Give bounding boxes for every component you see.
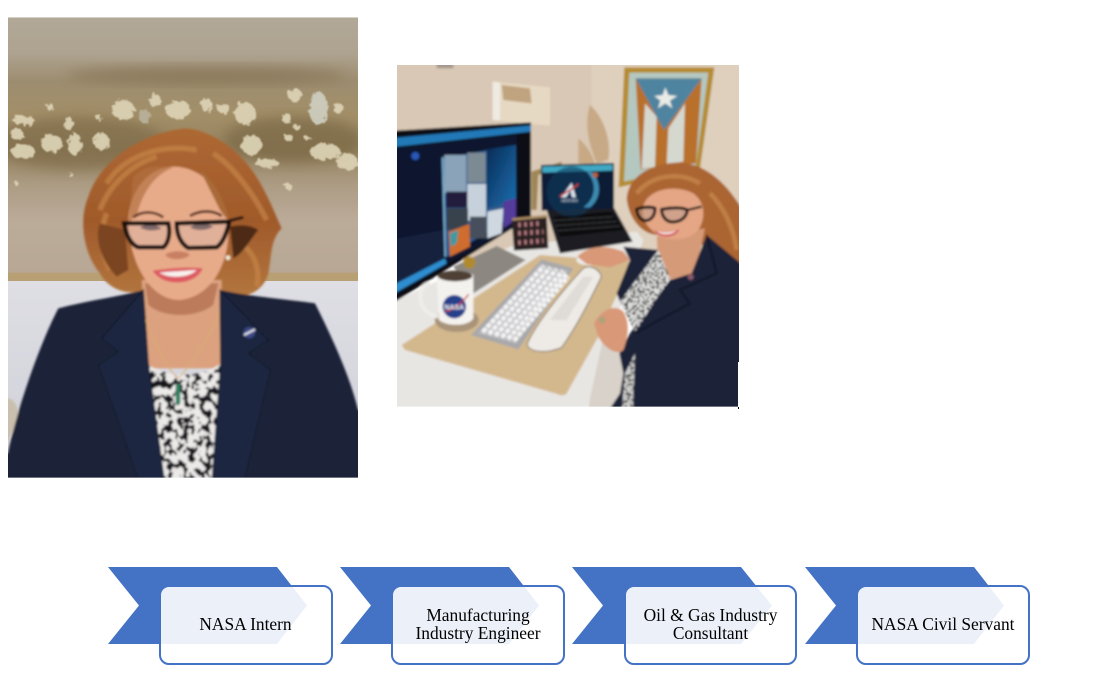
monitor image tiles (444, 155, 466, 193)
patterned block sign (512, 215, 548, 251)
jacket right (220, 289, 358, 478)
person: lapel pin (688, 274, 694, 280)
nose (165, 251, 190, 259)
eyes (140, 224, 213, 230)
monitor (390, 122, 531, 305)
person: hand with ring (594, 308, 628, 352)
lips and smile (153, 268, 203, 282)
glasses (124, 222, 229, 248)
person: arm and hand on mouse (577, 247, 630, 267)
step 4: NASA Civil Servant: NASA Civil Servant (872, 614, 1015, 634)
mug on coaster (420, 271, 479, 332)
wall behind subject (8, 281, 358, 454)
star (654, 87, 677, 108)
person: glasses (637, 207, 687, 222)
person: neck (657, 228, 705, 280)
step 3: Oil & Gas Industry Consultant (572, 567, 796, 664)
keyboard (471, 259, 573, 349)
wall art (500, 82, 550, 126)
desk photo (390, 60, 747, 413)
step 2: Manufacturing Industry Engineer: Manufacturing (426, 605, 530, 625)
person: smile (654, 229, 679, 237)
brown frame behind laptop (532, 162, 562, 210)
desk mat (402, 255, 632, 395)
Artemis logo (561, 183, 576, 197)
laptop (541, 163, 633, 253)
jacket left (8, 290, 143, 478)
step 3: Oil & Gas Industry Consultant: Consultant (673, 623, 748, 643)
person: hair (627, 163, 747, 268)
step 1: NASA Intern: NASA Intern (199, 614, 292, 634)
step 4: NASA Civil Servant (805, 567, 1029, 664)
wrist rest (527, 267, 601, 351)
step 2: Manufacturing Industry Engineer (340, 567, 564, 664)
mug on coaster: NASA (444, 304, 464, 311)
step 1: NASA Intern (108, 567, 332, 664)
room walls (390, 60, 594, 260)
eyebrows (133, 211, 222, 217)
framed flag (619, 67, 714, 187)
NASA logo on screen (411, 152, 419, 160)
mouse (575, 256, 592, 267)
pampas grass (578, 105, 609, 163)
face (128, 167, 228, 300)
lapels (141, 288, 166, 478)
desk surface (390, 232, 643, 413)
NASA lapel pin (244, 327, 255, 338)
person: face (643, 189, 703, 239)
step 3: Oil & Gas Industry Consultant: Oil & Gas Industry (644, 605, 778, 625)
monitor stand (453, 246, 526, 293)
earring (226, 255, 230, 260)
person: jacket (607, 235, 747, 413)
portrait photo (0, 17, 365, 485)
blouse (148, 364, 221, 485)
person: blouse (620, 250, 670, 332)
flag triangle (636, 78, 702, 130)
chair edge (0, 398, 18, 457)
necklace with pendant (144, 320, 188, 380)
laptop: ARTEMIS (561, 198, 578, 203)
gold abstract painting (0, 17, 363, 281)
step 2: Manufacturing Industry Engineer: Industry Engineer (415, 623, 541, 643)
neck and chest (142, 280, 222, 368)
photo edge notch (738, 362, 739, 409)
hair (83, 128, 282, 297)
